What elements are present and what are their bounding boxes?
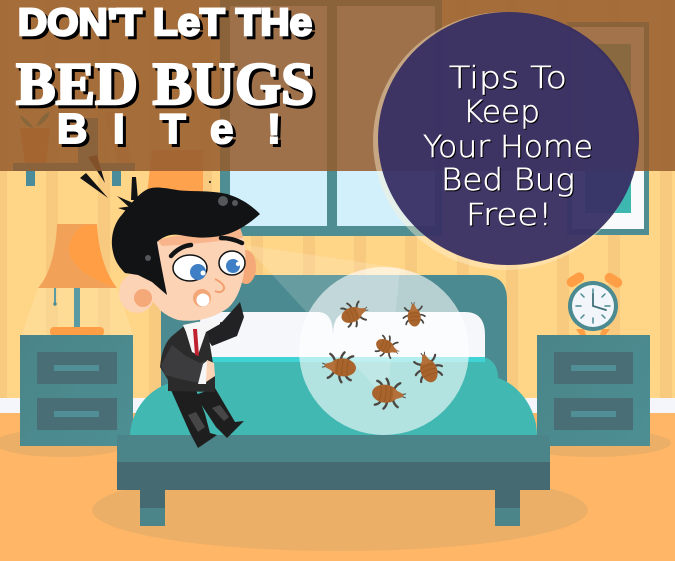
character: worried man in suit: [112, 177, 260, 448]
floor: [0, 413, 675, 561]
circle fill: [378, 12, 639, 265]
right nightstand: [537, 335, 650, 446]
knee highlights: [188, 405, 229, 432]
magnified bubble: [299, 267, 469, 435]
tie: [193, 329, 199, 356]
hair highlights: [145, 196, 238, 261]
eyebrows: [171, 238, 242, 256]
blanket: [130, 357, 537, 435]
shirt cuff: [198, 360, 208, 384]
magnifier light beam: [245, 245, 400, 400]
left bed leg: [140, 490, 165, 526]
tips text: Tips To: [449, 61, 567, 96]
forehead shadow: [157, 228, 243, 246]
wall picture frame: [567, 22, 649, 235]
hair tuft: [117, 177, 138, 212]
tips text: Bed Bug: [441, 163, 575, 198]
orange wall shade behind head: [147, 150, 203, 195]
surprise marks: [80, 155, 211, 198]
tips text: Free!: [466, 198, 552, 233]
alarm clock: [565, 270, 624, 335]
bed frame lower: [117, 462, 550, 490]
tips circle: [373, 12, 639, 270]
jacket sleeve: [161, 345, 214, 384]
title line: Bite!: BITe!: [57, 105, 281, 152]
wall with stripes: [0, 0, 675, 400]
tips text: Your Home: [423, 130, 593, 165]
title: [16, 2, 314, 152]
bed bugs: [321, 297, 446, 411]
head: [150, 228, 245, 321]
left lamp: [20, 224, 135, 340]
wall shelf with potted plant: [13, 112, 135, 186]
bed: [117, 275, 550, 526]
circle rim: [373, 12, 637, 270]
skirting board: [0, 398, 675, 413]
hair: [112, 187, 260, 295]
left nightstand: [20, 335, 133, 446]
nose: [215, 279, 224, 292]
title line: Don't Let The: DON'T LeT THe: [18, 2, 312, 44]
left ear: [119, 273, 155, 313]
floor shadows: [0, 429, 671, 551]
hand: [206, 360, 215, 382]
right bed leg: [495, 490, 520, 526]
mouth: [193, 289, 211, 307]
window: [220, 0, 442, 236]
legs and shoes: [171, 388, 244, 448]
title line: Bed Bugs: BED BUGS: [16, 51, 314, 117]
jacket: [160, 327, 215, 392]
blanket highlight: [205, 357, 485, 362]
eyes: [173, 251, 245, 281]
tips text: Keep: [463, 95, 540, 130]
raised arm: [203, 302, 244, 346]
right ear: [236, 250, 256, 284]
tips text: [423, 61, 593, 233]
shirt collar: [183, 320, 220, 355]
bed frame upper: [117, 435, 550, 462]
headboard: [161, 275, 507, 400]
brown banner overlay: [0, 0, 675, 171]
pillows: [200, 312, 485, 360]
